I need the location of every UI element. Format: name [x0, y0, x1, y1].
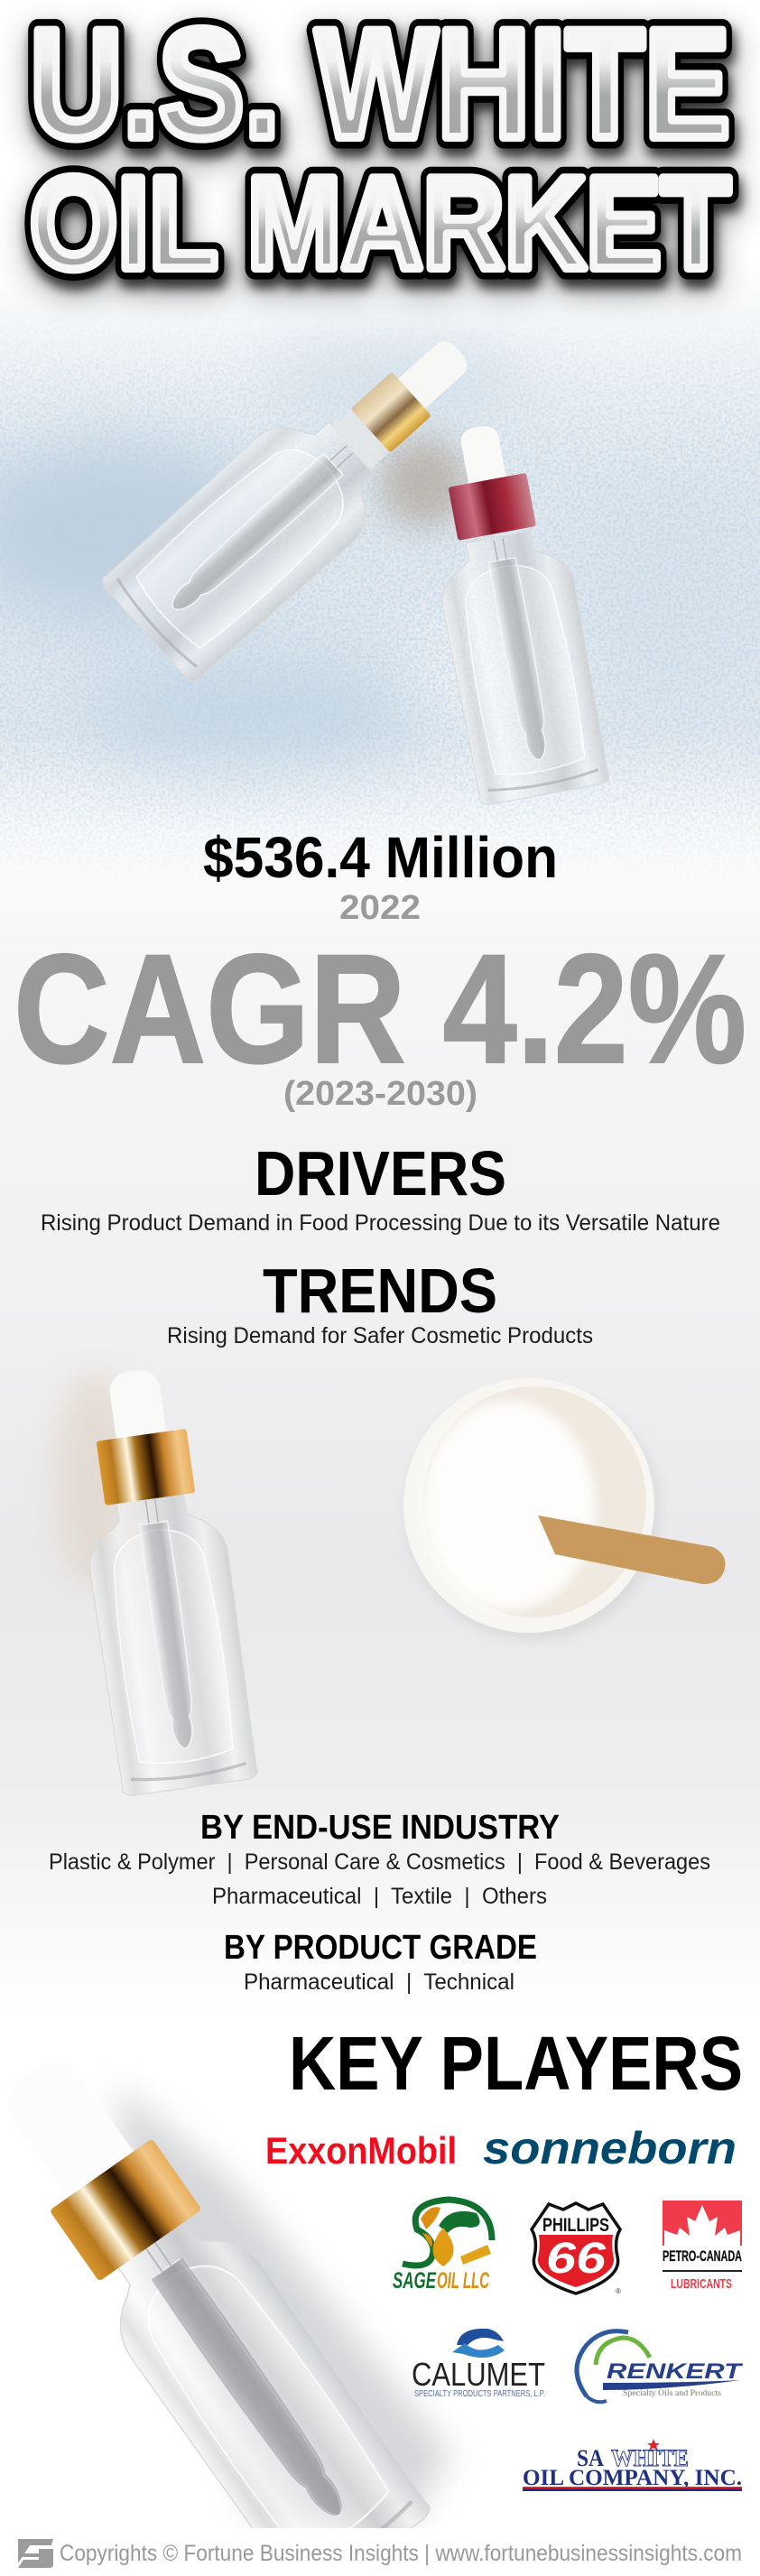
bottle: gold cap, white dropper [63, 1361, 260, 1797]
bottle: gold cap [98, 298, 506, 686]
footer band [0, 2528, 760, 2576]
logo: Phillips 66: ® [616, 2287, 621, 2295]
logo: Renkert [577, 2331, 744, 2402]
logo: Phillips 66: PHILLIPS [542, 2215, 609, 2236]
product grade items: Pharmaceutical | Technical [244, 1969, 514, 1995]
logo: Renkert: RENKERT [607, 2359, 744, 2384]
drivers text: Rising Product Demand in Food Processing Due to its Versatile Nature [41, 1210, 720, 1236]
segment heading: product grade: BY PRODUCT GRADE [224, 1929, 537, 1967]
bottle: red cap [412, 414, 611, 806]
bottle shadow [379, 438, 469, 528]
end-use line 1: Plastic & Polymer | Personal Care & Cosmetics | Food & Beverages [49, 1849, 710, 1875]
photo: bottle and cream jar [54, 1361, 725, 1797]
logo: SA White Oil Company: OIL COMPANY, INC. [523, 2466, 742, 2490]
bottle shadow [54, 1372, 135, 1589]
middle background [0, 812, 760, 2022]
segment heading: end-use industry: BY END-USE INDUSTRY [200, 1809, 560, 1847]
forecast period: (2023-2030) [283, 1075, 477, 1113]
drivers heading: DRIVERS [255, 1138, 506, 1209]
logo: Calumet: SPECIALTY PRODUCTS PARTNERS, L.P. [414, 2389, 545, 2399]
footer logo [18, 2539, 53, 2568]
logo: SA White Oil Company: SA [577, 2445, 604, 2471]
trends heading: TRENDS [263, 1256, 497, 1326]
wooden spatula [538, 1515, 725, 1584]
logo: SA White Oil Company [523, 2439, 742, 2491]
logo: Calumet [412, 2329, 545, 2399]
title [30, 0, 733, 309]
logo: SA White Oil Company: WHITE [611, 2445, 689, 2471]
bottle [0, 2026, 434, 2576]
logo: Phillips 66 [532, 2203, 621, 2295]
cream jar [403, 1378, 725, 1641]
bottle shadow [117, 2085, 451, 2527]
trends text: Rising Demand for Safer Cosmetic Products [167, 1323, 593, 1348]
end-use line 2: Pharmaceutical | Textile | Others [212, 1884, 547, 1909]
title shadow [32, 5, 733, 309]
base year: 2022 [339, 889, 421, 927]
logo: Renkert: Specialty Oils and Products [623, 2389, 721, 2398]
logo: Phillips 66: 66 [546, 2235, 606, 2283]
logo: Sage Oil [393, 2200, 492, 2293]
logo: Sage Oil: OIL LLC [437, 2268, 490, 2293]
market value: $536.4 Million [203, 825, 558, 890]
logo: sonneborn: sonneborn [483, 2123, 737, 2173]
plaster background [0, 304, 760, 865]
logo: Calumet: CALUMET [412, 2356, 545, 2393]
logo: Sage Oil: SAGE [393, 2268, 437, 2293]
photo: two dropper bottles on blue plaster [0, 304, 760, 865]
logo: Petro-Canada Lubricants: LUBRICANTS [671, 2276, 732, 2292]
photo: large dropper bottle [0, 2026, 451, 2576]
logo: Petro-Canada Lubricants [663, 2201, 742, 2292]
logo: ExxonMobil: ExxonMobil [265, 2129, 457, 2172]
